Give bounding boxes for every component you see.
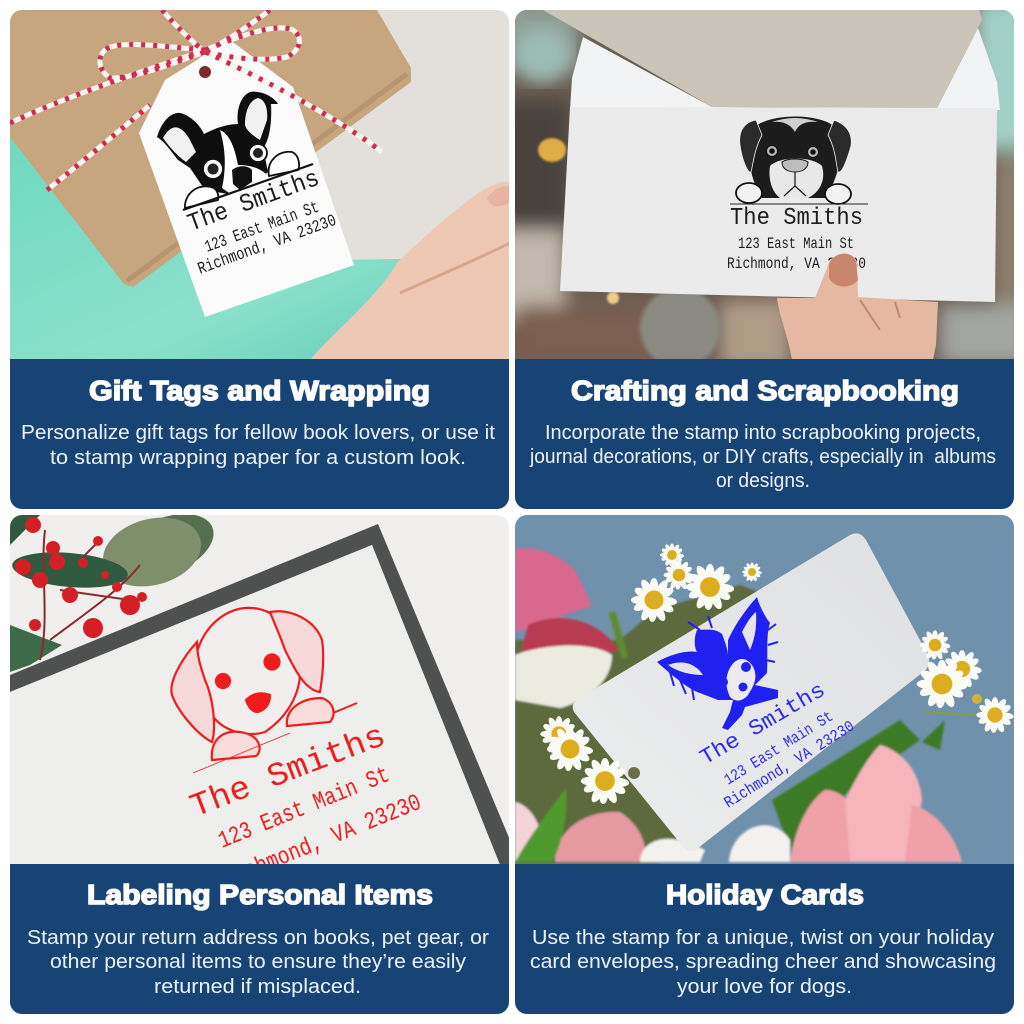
heading: Gift Tags and Wrapping <box>89 375 430 406</box>
envelope front <box>560 107 997 302</box>
stamp address text: The Smiths <box>185 718 391 826</box>
description: returned if misplaced. <box>154 976 361 998</box>
bouquet backdrop <box>515 548 962 864</box>
description: your love for dogs. <box>677 976 852 998</box>
book page <box>10 545 500 865</box>
hand <box>310 182 510 360</box>
stamp address text: The Smiths <box>184 164 323 239</box>
twine bow <box>10 10 382 152</box>
stamp address text: Richmond, VA 23230 <box>721 717 858 812</box>
gift tag <box>139 37 354 317</box>
description: Stamp your return address on books, pet gear, or <box>27 927 489 949</box>
card <box>573 533 929 851</box>
photo: gift with tag <box>10 10 510 360</box>
stamp address text: 123 East Main St <box>203 199 322 258</box>
caption band <box>10 359 509 509</box>
description: Personalize gift tags for fellow book lovers, or use it <box>21 422 495 444</box>
stamp address text: 123 East Main St <box>738 235 854 253</box>
caption band <box>515 864 1014 1014</box>
panel: holiday cards <box>515 515 1015 1014</box>
stamp address text <box>186 173 336 274</box>
blurred background <box>515 10 1014 359</box>
stamp address text <box>698 686 854 808</box>
stamp dog: boxer <box>730 116 868 204</box>
kraft box <box>10 10 411 287</box>
hand holding envelope <box>777 253 938 360</box>
stamp address text <box>727 205 866 273</box>
stamp dog: puppy <box>171 608 357 773</box>
red berries with stems <box>15 517 147 660</box>
heading: Holiday Cards <box>666 879 864 910</box>
description: Use the stamp for a unique, twist on your holiday <box>532 927 994 949</box>
stamp dog: boston terrier <box>157 92 313 210</box>
stamp address text: Richmond, VA 23230 <box>727 255 866 273</box>
envelope flaps <box>570 28 1000 110</box>
eucalyptus leaves <box>10 515 214 672</box>
panel: crafting and scrapbooking <box>500 0 1024 509</box>
stamp address text: The Smiths <box>696 678 830 771</box>
panel: gift tags and wrapping <box>10 10 510 509</box>
stamp address text: 123 East Main St <box>721 708 837 789</box>
caption band <box>515 359 1014 509</box>
description: to stamp wrapping paper for a custom look. <box>50 447 466 469</box>
description <box>21 422 495 469</box>
stamp address text: 123 East Main St <box>215 762 394 855</box>
kraft card <box>543 10 982 108</box>
heading: Labeling Personal Items <box>87 879 433 910</box>
photo: book with stamp <box>10 515 509 864</box>
description: or designs. <box>716 470 810 492</box>
stamp address text: The Smiths <box>730 205 863 232</box>
description: card envelopes, spreading cheer and showcasing <box>530 951 996 973</box>
lower twine strand <box>47 105 150 190</box>
daisies <box>540 543 1014 805</box>
stamp address text <box>188 730 420 864</box>
panel: labeling personal items <box>10 501 510 1014</box>
heading: Crafting and Scrapbooking <box>571 375 959 406</box>
stamp address text: Richmond, VA 23230 <box>219 790 426 894</box>
book cover <box>10 524 510 865</box>
stamp dog: papillon <box>657 597 778 730</box>
caption band <box>10 864 509 1014</box>
description <box>27 927 489 998</box>
description <box>529 422 996 492</box>
photo: envelope <box>515 10 1014 359</box>
stamp address text: Richmond, VA 23230 <box>196 212 339 280</box>
photo: card in bouquet <box>515 515 1015 865</box>
description: other personal items to ensure they’re easily <box>50 951 466 973</box>
description: Incorporate the stamp into scrapbooking projects, <box>545 422 981 444</box>
description <box>530 927 996 998</box>
description: journal decorations, or DIY crafts, especially in albums <box>529 446 996 468</box>
